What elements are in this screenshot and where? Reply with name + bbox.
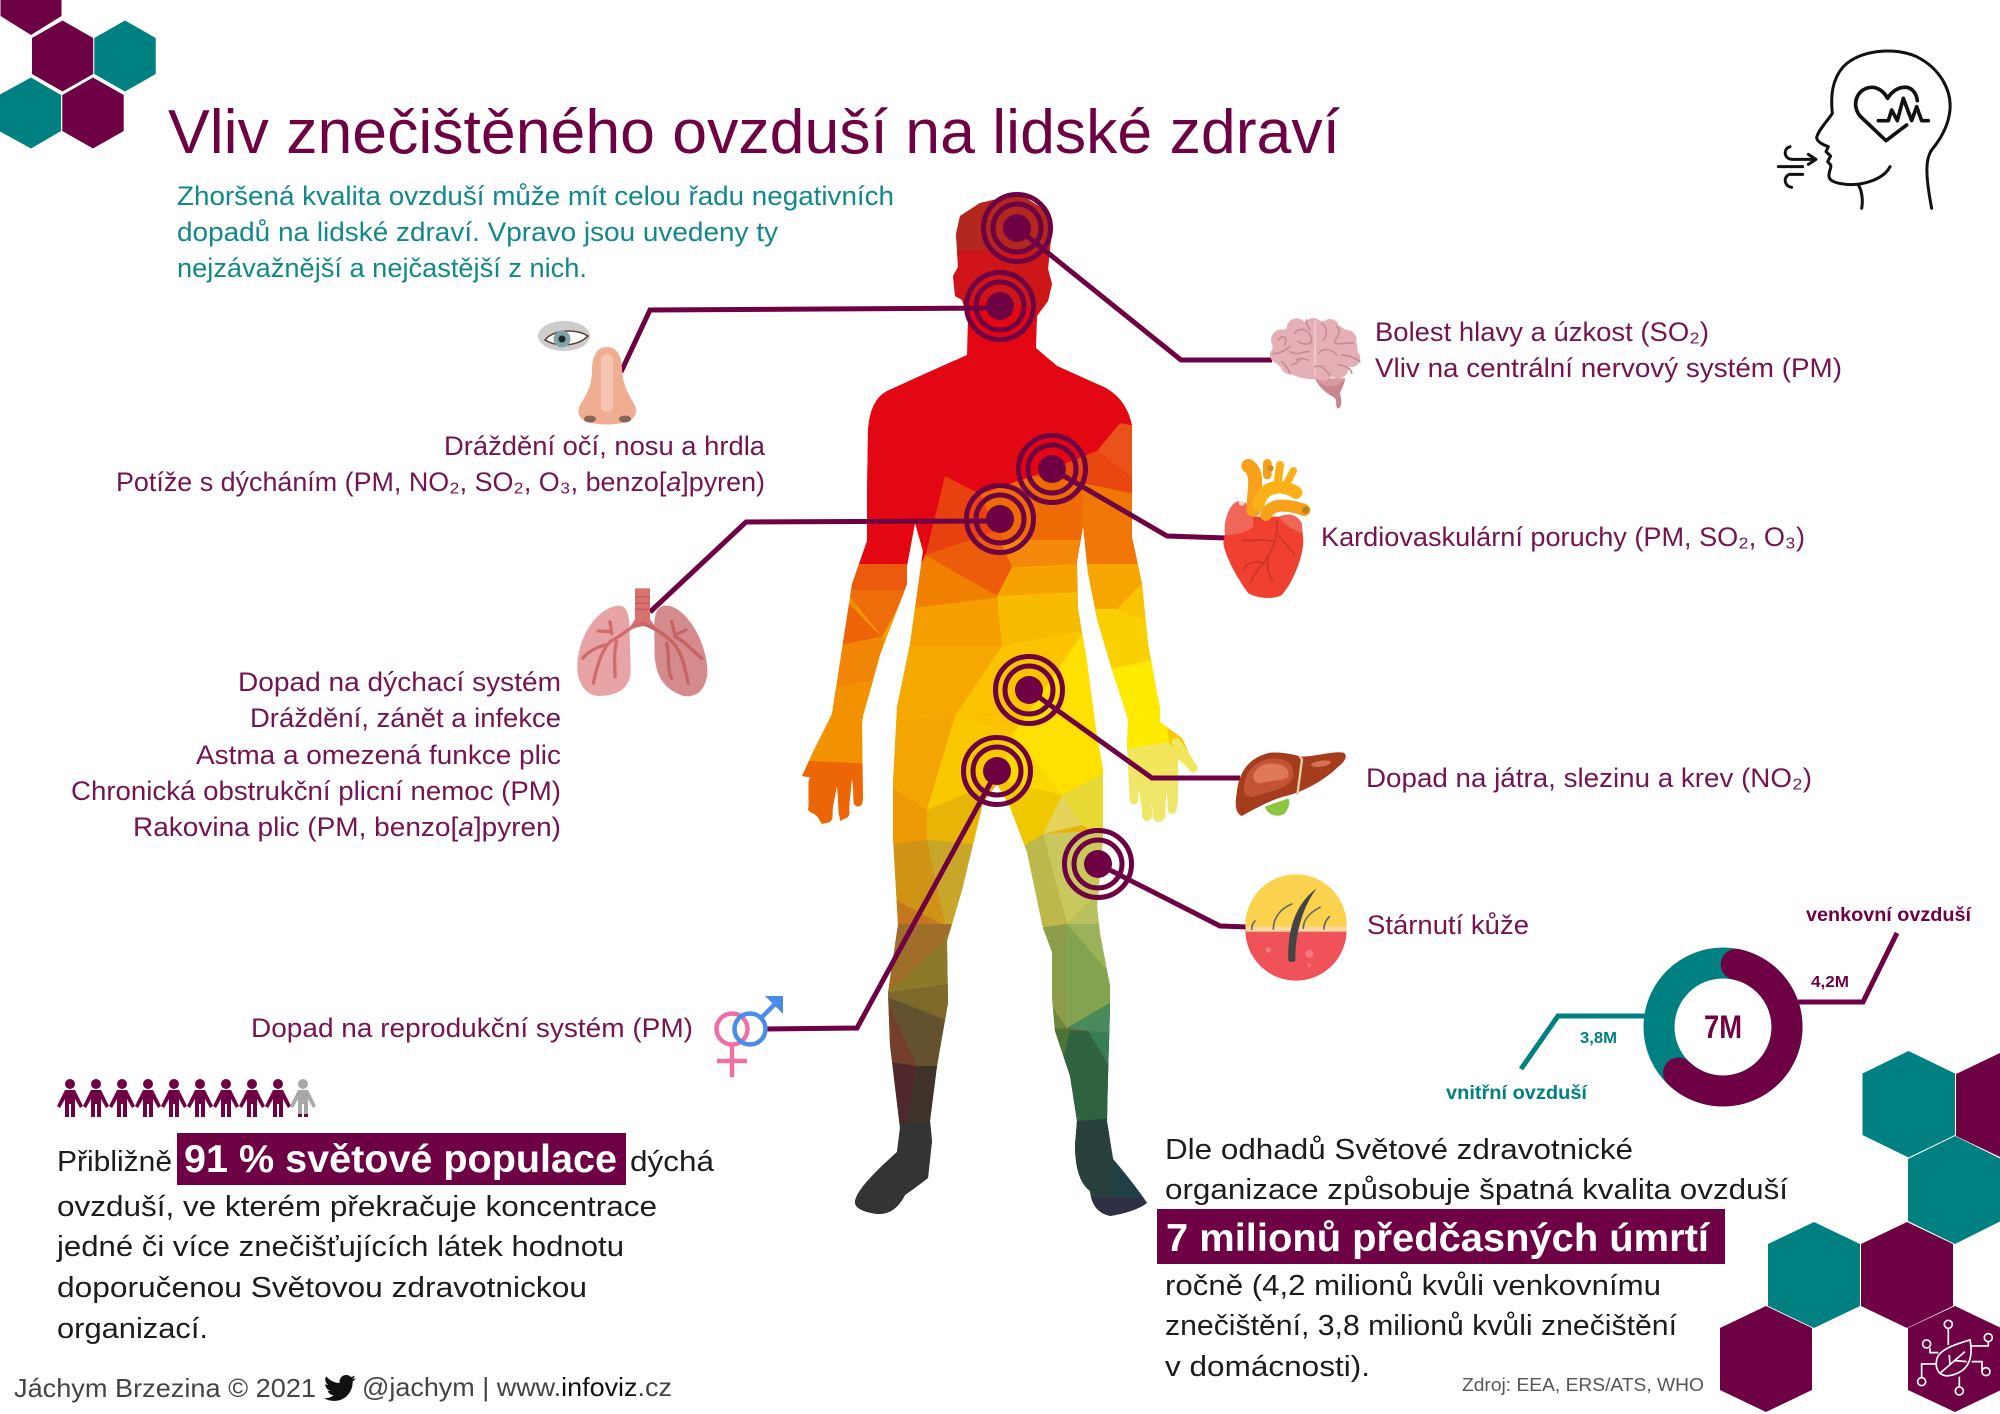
pictogram: 9 of 10 people xyxy=(57,1079,316,1117)
text: respiratory effects: Rakovina plic (PM, benzo[ a]pyren) xyxy=(133,812,561,842)
title: Vliv znečištěného ovzduší na lidské zdraví xyxy=(168,98,1340,167)
text: respiratory effects: Dopad na dýchací systém xyxy=(238,667,561,697)
text block: 7 million deaths xyxy=(1157,1134,1788,1383)
icon: lungs xyxy=(577,588,707,696)
text block: 7 million deaths: v domácnosti). xyxy=(1165,1351,1370,1383)
icon: leaf circuit xyxy=(1918,1320,1992,1395)
icon: liver xyxy=(1236,752,1346,816)
donut chart: 4,2M xyxy=(1811,974,1849,991)
donut chart xyxy=(1446,905,1972,1104)
icon: nose xyxy=(578,347,636,424)
decorative hexagons top left xyxy=(0,0,156,148)
intro text: Zhoršená kvalita ovzduší může mít celou řadu negativních xyxy=(177,181,894,211)
intro text xyxy=(177,181,894,283)
connector: abdomen to liver xyxy=(1029,690,1240,778)
text block: 7 million deaths: Dle odhadů Světové zdravotnické xyxy=(1165,1134,1633,1166)
text: eye, nose, throat: Potíže s dýcháním (PM, NO₂, SO₂, O₃, benzo[ a]pyren) xyxy=(116,467,765,497)
right hand fingers xyxy=(1134,742,1193,817)
footer credit xyxy=(14,1372,672,1403)
source note: Zdroj: EEA, ERS/ATS, WHO xyxy=(1462,1375,1704,1395)
footer credit: @jachym | www. infoviz.cz xyxy=(362,1372,672,1402)
text: cardiovascular: Kardiovaskulární poruchy (PM, SO₂, O₃) xyxy=(1321,522,1805,552)
icon: heart organ xyxy=(1223,463,1309,598)
target rings xyxy=(964,194,1132,898)
text: respiratory effects xyxy=(71,667,561,842)
text block: 7 million deaths: 7 milionů předčasných úmrtí xyxy=(1166,1217,1710,1260)
connector: lungs xyxy=(650,521,1000,612)
text: headache and central nervous system: Bolest hlavy a úzkost (SO₂) xyxy=(1375,317,1709,347)
left hand fingers xyxy=(814,770,858,817)
donut chart: 3,8M xyxy=(1580,1030,1617,1047)
text: respiratory effects: Chronická obstrukční plicní nemoc (PM) xyxy=(71,776,561,806)
text block: 91 percent: dýchá xyxy=(630,1146,715,1178)
text block: 7 million deaths: ročně (4,2 milionů kvůli venkovnímu xyxy=(1165,1270,1661,1302)
connector: chest to heart xyxy=(1052,469,1226,538)
donut chart: venkovní ovzduší xyxy=(1806,905,1972,926)
text: eye, nose, throat xyxy=(116,431,765,497)
text block: 7 million deaths: znečištění, 3,8 milionů kvůli znečištění xyxy=(1165,1310,1677,1342)
icon: gender symbols xyxy=(716,996,783,1077)
connector: neck to nose xyxy=(621,308,1000,372)
connector: pelvis to reproductive symbol xyxy=(765,771,997,1029)
text block: 91 percent: Přibližně xyxy=(57,1146,172,1178)
text: headache and central nervous system: Vliv na centrální nervový systém (PM) xyxy=(1375,353,1842,383)
donut chart: vnitřní ovzduší xyxy=(1446,1083,1588,1104)
text block: 91 percent: ovzduší, ve kterém překračuje koncentrace xyxy=(57,1191,657,1223)
text block: 91 percent xyxy=(56,1133,715,1345)
human body low-poly silhouette xyxy=(802,197,1197,1216)
icon: head with heart and breath xyxy=(1778,51,1950,208)
text: liver, spleen, blood: Dopad na játra, slezinu a krev (NO₂) xyxy=(1366,763,1812,793)
icon: eye xyxy=(538,321,590,351)
footer credit: Jáchym Brzezina © 2021 xyxy=(14,1373,316,1403)
text: skin ageing: Stárnutí kůže xyxy=(1367,910,1529,940)
text: reproductive system: Dopad na reprodukční systém (PM) xyxy=(251,1013,693,1043)
text block: 91 percent: organizací. xyxy=(57,1313,208,1345)
connector: head to brain xyxy=(1017,228,1272,360)
text: respiratory effects: Dráždění, zánět a infekce xyxy=(250,703,561,733)
connector: thigh to skin xyxy=(1098,864,1248,927)
intro text: nejzávažnější a nejčastější z nich. xyxy=(177,253,587,283)
text block: 91 percent: doporučenou Světovou zdravotnickou xyxy=(57,1272,587,1304)
decorative hexagons bottom right xyxy=(1720,1051,2000,1412)
intro text: dopadů na lidské zdraví. Vpravo jsou uvedeny ty xyxy=(177,217,779,247)
text: eye, nose, throat: Dráždění očí, nosu a hrdla xyxy=(444,431,765,461)
icon: brain xyxy=(1270,318,1360,409)
text: respiratory effects: Astma a omezená funkce plic xyxy=(196,740,561,770)
text block: 91 percent: 91 % světové populace xyxy=(184,1138,617,1181)
text: headache and central nervous system xyxy=(1375,317,1842,383)
text block: 7 million deaths: organizace způsobuje špatná kvalita ovzduší xyxy=(1165,1174,1788,1206)
icon: skin xyxy=(1245,874,1347,981)
text block: 91 percent: jedné či více znečišťujících látek hodnotu xyxy=(56,1231,624,1263)
donut chart: 7M xyxy=(1704,1009,1742,1045)
